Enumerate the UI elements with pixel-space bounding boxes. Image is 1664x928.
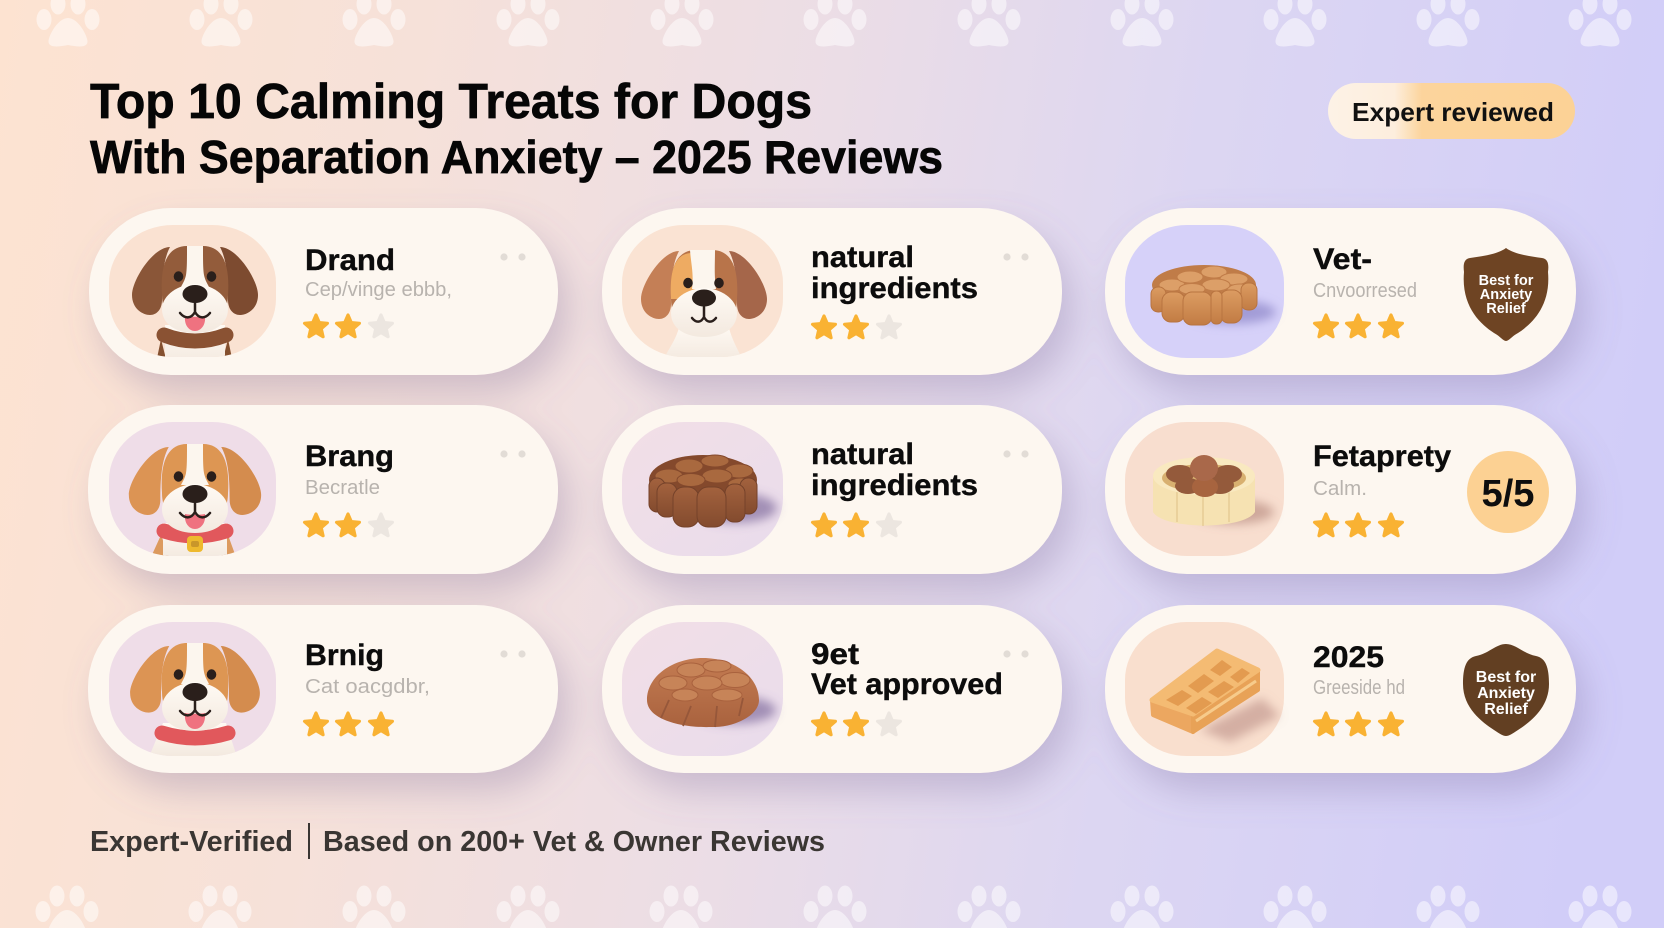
star rating	[1315, 514, 1402, 536]
star rating	[813, 713, 900, 735]
thumbnail: brown dog	[109, 225, 276, 365]
footer line: Expert-Verified	[90, 826, 293, 858]
title: With Separation Anxiety – 2025 Reviews	[90, 131, 943, 183]
brand name: Fetaprety	[1313, 440, 1451, 473]
panel: card row 3 column 2	[602, 605, 1062, 773]
brand name: Vet approved	[811, 668, 1003, 701]
menu dots	[500, 450, 526, 458]
brand name	[811, 438, 978, 502]
panel: card row 3 column 3	[1105, 605, 1576, 773]
card shadows	[99, 226, 1586, 791]
title	[90, 75, 943, 183]
star rating	[813, 514, 900, 536]
brand name: natural	[811, 438, 914, 471]
panel: card row 1 column 3	[1105, 208, 1576, 375]
star rating	[813, 316, 900, 338]
descriptor: Greeside hd	[1313, 677, 1405, 699]
menu dots	[500, 253, 526, 261]
star rating	[305, 713, 392, 735]
badge: best for anxiety relief: Anxiety	[1480, 287, 1532, 303]
brand name	[811, 638, 1003, 701]
star rating	[305, 315, 392, 337]
footer line: Based on 200+ Vet & Owner Reviews	[323, 826, 825, 858]
panel: card row 1 column 2	[602, 208, 1062, 375]
badge: best for anxiety relief: Best for	[1479, 273, 1534, 289]
thumbnail: brown lump treat	[622, 422, 783, 556]
thumbnail: orange dog with red collar	[109, 622, 276, 757]
paw pattern top	[36, 0, 1632, 46]
brand name: ingredients	[811, 272, 978, 305]
badge: best for anxiety relief: Best for	[1476, 669, 1536, 686]
descriptor: Calm.	[1313, 478, 1367, 500]
brand name	[811, 241, 978, 305]
thumbnail: golden bar treat	[1125, 622, 1284, 756]
panel: card row 2 column 3	[1105, 405, 1576, 574]
menu dots	[500, 650, 526, 658]
star rating	[1315, 315, 1402, 337]
footer line	[90, 823, 825, 859]
panel: card row 1 column 1	[89, 208, 558, 375]
descriptor: Cat oacgdbr,	[305, 676, 430, 698]
badge: best for anxiety relief	[1463, 644, 1549, 736]
menu dots	[1003, 650, 1029, 658]
badge: best for anxiety relief	[1464, 248, 1548, 341]
descriptor: Cnvoorresed	[1313, 280, 1417, 302]
panel: card row 3 column 1	[88, 605, 558, 773]
badge: best for anxiety relief: Relief	[1486, 301, 1526, 317]
brand name: ingredients	[811, 469, 978, 502]
panel: card row 2 column 2	[602, 405, 1062, 574]
brand name: 2025	[1313, 641, 1384, 674]
score badge: 5/5	[1482, 473, 1534, 515]
brand name: natural	[811, 241, 914, 274]
brand name: Brang	[305, 440, 394, 473]
thumbnail: orange dog with tag	[109, 422, 276, 559]
brand name: 9et	[811, 638, 859, 671]
thumbnail: tan dog	[622, 225, 783, 361]
badge: expert reviewed	[1328, 83, 1575, 139]
star rating	[1315, 713, 1402, 735]
descriptor: Becratle	[305, 477, 380, 499]
descriptor: Cep/vinge ebbb,	[305, 279, 452, 301]
thumbnail: round brown treat	[622, 622, 783, 756]
title: Top 10 Calming Treats for Dogs	[90, 75, 812, 129]
menu dots	[1003, 253, 1029, 261]
thumbnail: tan lump treat	[1125, 225, 1284, 358]
badge: best for anxiety relief: Anxiety	[1477, 685, 1535, 702]
badge: expert reviewed: Expert reviewed	[1352, 97, 1554, 127]
thumbnail: cream bowl treat	[1125, 422, 1284, 556]
brand name: Brnig	[305, 639, 384, 672]
paw pattern bottom	[36, 886, 1632, 928]
score badge	[1467, 451, 1549, 533]
menu dots	[1003, 450, 1029, 458]
star rating	[305, 514, 392, 536]
badge: best for anxiety relief: Relief	[1484, 701, 1528, 718]
brand name: Vet-	[1313, 243, 1372, 276]
panel: card row 2 column 1	[88, 405, 558, 574]
brand name: Drand	[305, 244, 395, 277]
